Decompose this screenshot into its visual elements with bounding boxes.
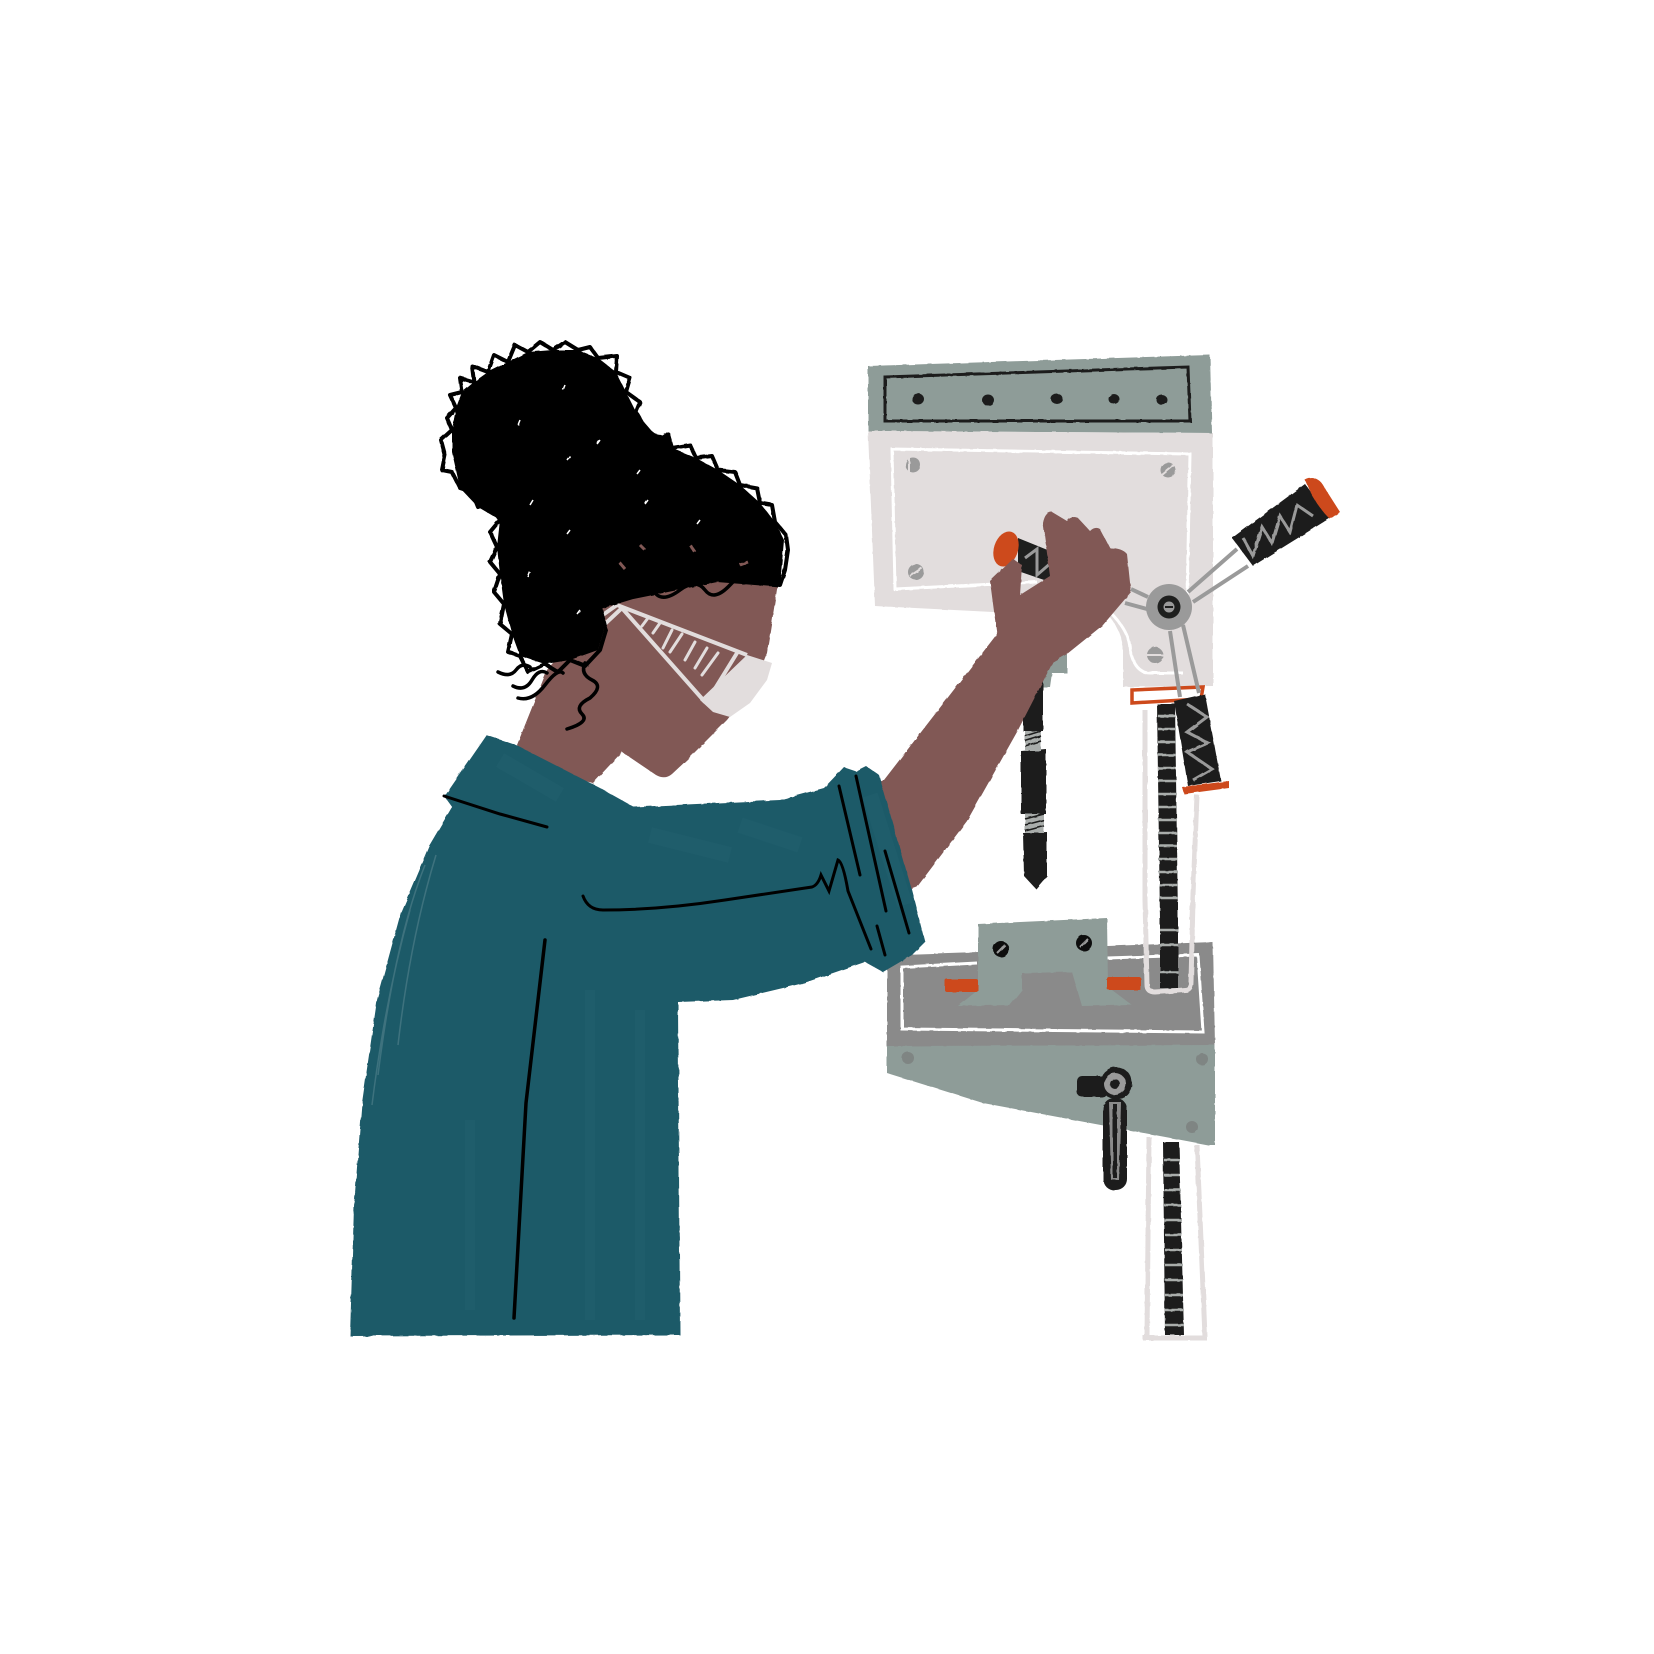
jacket brush texture (372, 760, 905, 1320)
press head: light body with plate (868, 431, 1213, 687)
work table lower bracket (887, 1045, 1215, 1145)
orange collar (1132, 687, 1203, 703)
handle spokes (1125, 549, 1248, 697)
safety goggles (582, 605, 772, 717)
drill bit and chuck (998, 612, 1067, 889)
lower handle (1174, 694, 1229, 794)
column passing through table (1145, 900, 1193, 992)
hair fringe and loose curls (498, 572, 767, 729)
vise clamp (945, 918, 1141, 1006)
hair (441, 342, 788, 672)
locking lever (1077, 1067, 1132, 1190)
forearm and hand (860, 512, 1131, 900)
press head: upper housing (868, 355, 1212, 433)
jacket (350, 735, 925, 1336)
upper right handle (1232, 478, 1340, 566)
work table top (887, 942, 1215, 1046)
figure: neck and face (517, 565, 778, 783)
held handle (989, 528, 1055, 582)
hub (1146, 584, 1192, 630)
drill press column (1143, 704, 1207, 1338)
jacket line drawing (444, 776, 909, 1318)
